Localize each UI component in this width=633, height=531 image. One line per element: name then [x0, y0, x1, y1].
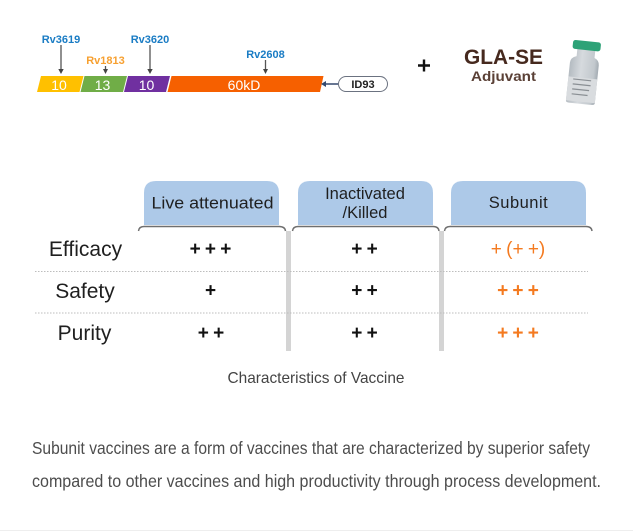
segment 10 purple: 10: [139, 77, 154, 93]
ratings: Subunit: [491, 239, 545, 344]
ratings: Inactivated: + +: [351, 280, 378, 302]
arrow to bar: [321, 81, 338, 87]
header: Inactivated / Killed: Inactivated: [325, 185, 405, 203]
GLA-SE adjuvant label: Adjuvant: [471, 68, 536, 84]
segment 10 yellow: [37, 76, 84, 93]
GLA-SE adjuvant label: GLA-SE: [464, 46, 543, 69]
ratings: Subunit: + + +: [497, 280, 539, 302]
comparison table: [35, 181, 592, 351]
segment 60kD orange: 60kD: [228, 77, 260, 93]
label Rv3620 with arrow: Rv3620: [131, 34, 169, 46]
description text: [32, 438, 601, 491]
ratings: Subunit: + + +: [497, 323, 539, 344]
ratings: Subunit: + (+ +): [491, 239, 545, 260]
ID93 pill: [338, 76, 388, 92]
ratings: Live attenuated: + + +: [190, 239, 231, 260]
ratings: Live attenuated: +: [205, 280, 216, 302]
row labels: [49, 238, 123, 345]
segment 13 green: 13: [95, 77, 110, 93]
antigen diagram: ID93 fusion protein: [37, 34, 388, 93]
segment 13 green: [80, 76, 127, 93]
caption: Characteristics of Vaccine: [228, 370, 405, 387]
ratings: Inactivated: [351, 239, 378, 344]
header: Subunit: [451, 181, 586, 225]
GLA-SE adjuvant label: [464, 46, 543, 84]
label Rv2608 with arrow: Rv2608: [246, 49, 285, 61]
header: Live attenuated: [144, 181, 279, 225]
ratings: Inactivated: + +: [351, 239, 378, 260]
header: Inactivated / Killed: /Killed: [343, 204, 387, 222]
segment 10 yellow: 10: [51, 77, 67, 93]
label Rv1813 with arrow: [86, 55, 125, 74]
segment 60kD orange: [168, 76, 324, 93]
plus sign: [418, 60, 430, 72]
row labels: Efficacy: [49, 238, 123, 261]
header: Live attenuated: Live attenuated: [152, 194, 274, 212]
ID93 pill: ID93: [351, 79, 375, 91]
row labels: Purity: [58, 322, 112, 345]
row labels: Safety: [55, 280, 115, 303]
label Rv1813 with arrow: Rv1813: [86, 55, 125, 67]
header: Inactivated / Killed: [298, 181, 433, 225]
ratings: Live attenuated: [190, 239, 231, 344]
label Rv3619 with arrow: [42, 34, 80, 74]
icon: vaccine vial: [566, 40, 601, 105]
ratings: Live attenuated: + +: [198, 323, 224, 344]
header: Subunit: Subunit: [489, 194, 548, 212]
segment 10 purple: [124, 76, 170, 93]
label Rv2608 with arrow: [246, 49, 285, 74]
label Rv3619 with arrow: Rv3619: [42, 34, 80, 46]
ratings: Inactivated: + +: [351, 323, 378, 344]
label Rv3620 with arrow: [131, 34, 169, 74]
